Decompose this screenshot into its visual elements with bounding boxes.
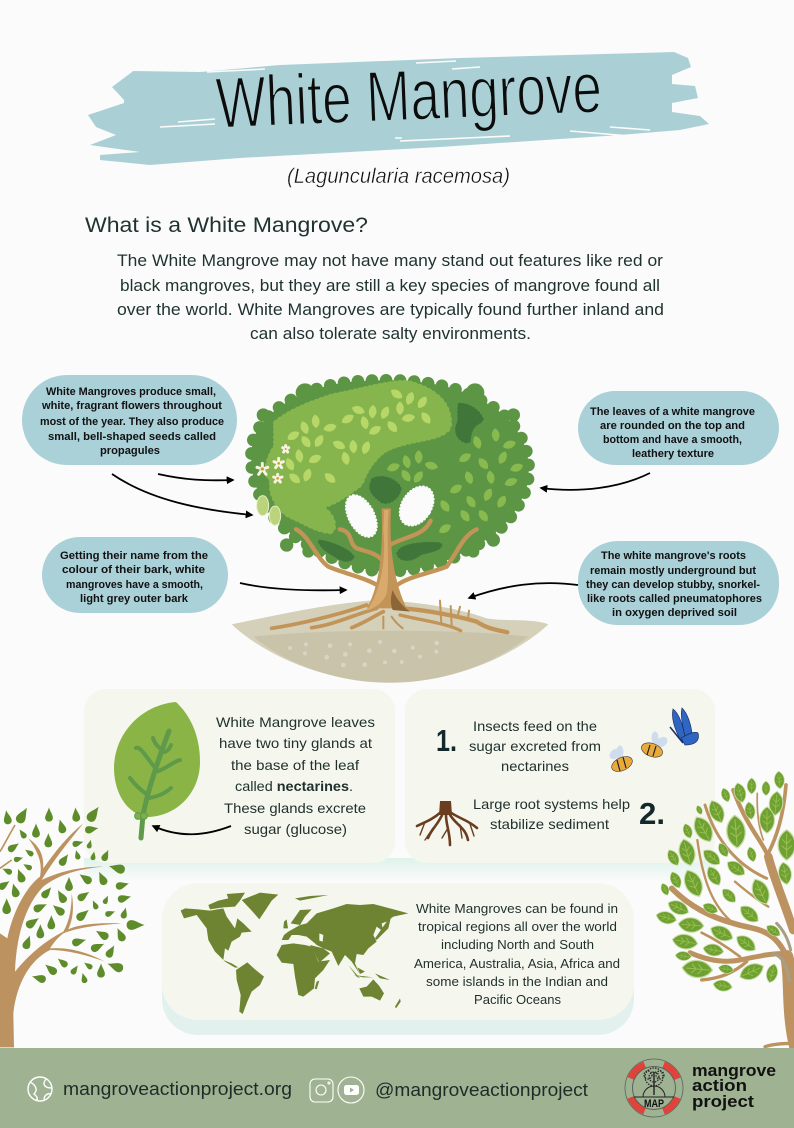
trunk and roots [272,508,507,632]
logo wordmark: project [692,1093,755,1111]
callout: flowers: most of the year. They also produce [40,416,224,428]
title brush stroke [88,52,709,165]
nectarines text: White Mangrove leaves [216,714,375,730]
insects text: sugar excreted from [469,738,601,754]
callout: flowers [22,375,237,465]
distribution text [414,902,620,1007]
icon: globe [28,1077,52,1101]
callout: leaves [578,391,779,465]
canopy [251,380,529,572]
intro paragraph [117,252,664,343]
heading: what is a white mangrove: What is a White Mangrove? [85,214,368,237]
icon: root system [417,801,477,845]
nectarines text: sugar (glucose) [244,821,347,837]
arrow to glands [153,826,231,834]
callout: roots: The white mangrove's roots [601,550,746,562]
callout: bark: colour of their bark, white [62,564,205,576]
callout: roots: in oxygen deprived soil [612,607,737,619]
callout: flowers: White Mangroves produce small, [46,386,216,398]
insects text: nectarines [501,758,569,774]
insects text: Insects feed on the [473,718,597,734]
panel: nectarines [84,689,395,863]
callout: roots [578,541,779,625]
right decorative tree [655,771,794,1050]
panel: distribution [162,883,634,1020]
title: White Mangrove [214,48,603,144]
callout: leaves: bottom and have a smooth, [603,434,742,446]
logo wordmark: mangrove [692,1062,776,1080]
flowers [257,446,289,482]
logo mark: MAP [644,1098,664,1110]
roots text: stabilize sediment [490,816,609,832]
social handle: @mangroveactionproject [375,1080,588,1100]
intro paragraph: The White Mangrove may not have many stand out features like red or [117,252,664,270]
mid-green leaves [386,428,524,535]
callout: bark: mangroves have a smooth, [66,579,203,591]
footer [0,1048,794,1128]
panel: distribution base [162,898,634,1035]
intro paragraph: can also tolerate salty environments. [250,325,531,343]
distribution text: tropical regions all over the world [418,920,617,934]
callout: roots: remain mostly underground but [590,565,756,577]
left decorative tree [0,804,145,1047]
callout: leaves: are rounded on the top and [600,420,745,432]
callout: bark [42,537,228,613]
roots text [473,796,630,832]
soil mound [232,601,548,683]
panel: insects and roots [405,689,715,863]
propagule seeds [257,496,281,525]
callout: leaves: The leaves of a white mangrove [590,406,755,418]
distribution text: White Mangroves can be found in [416,902,618,916]
distribution text: Pacific Oceans [474,993,561,1007]
logo mark [625,1059,683,1117]
icon: green leaf with glands [114,702,200,838]
callout: flowers: propagules [100,445,160,457]
subtitle: scientific name: (Laguncularia racemosa) [287,165,510,188]
callout: bark: Getting their name from the [60,550,208,562]
icon: instagram [310,1079,333,1102]
insects text [469,718,601,774]
nectarines text: the base of the leaf [231,757,359,773]
arrows to tree [112,473,650,598]
distribution text: including North and South [441,938,594,952]
icon: youtube [338,1077,364,1103]
intro paragraph: black mangroves, but they are still a key species of mangrove found all [120,277,660,295]
nectarines text: called nectarines. [235,778,353,794]
nectarines text: These glands excrete [224,800,366,816]
light leaves [284,387,433,486]
nectarines text: have two tiny glands at [219,735,372,751]
number 2: 2. [639,796,665,831]
callout: leaves: leathery texture [632,448,714,460]
icon: bees and butterfly [608,708,698,775]
logo wordmark: action [692,1077,747,1095]
sky gaps in canopy [340,481,440,541]
nectarines text [216,714,375,837]
world map [181,893,408,1014]
distribution text: some islands in the Indian and [426,975,608,989]
website: mangroveactionproject.org [63,1079,292,1099]
callout: bark: light grey outer bark [80,593,189,605]
callout: roots: they can develop stubby, snorkel- [586,579,760,591]
callout: flowers: white, fragrant flowers throughout [41,400,222,412]
roots text: Large root systems help [473,796,630,812]
number 1: 1. [436,723,457,758]
main tree illustration [232,380,548,683]
intro paragraph: over the world. White Mangroves are typically found further inland and [117,301,664,319]
logo wordmark [692,1062,776,1111]
shadow band beneath panels [84,858,715,882]
callout: flowers: small, bell-shaped seeds called [48,431,216,443]
distribution text: America, Australia, Asia, Africa and [414,957,620,971]
callout: roots: like roots called pneumatophores [587,593,762,605]
